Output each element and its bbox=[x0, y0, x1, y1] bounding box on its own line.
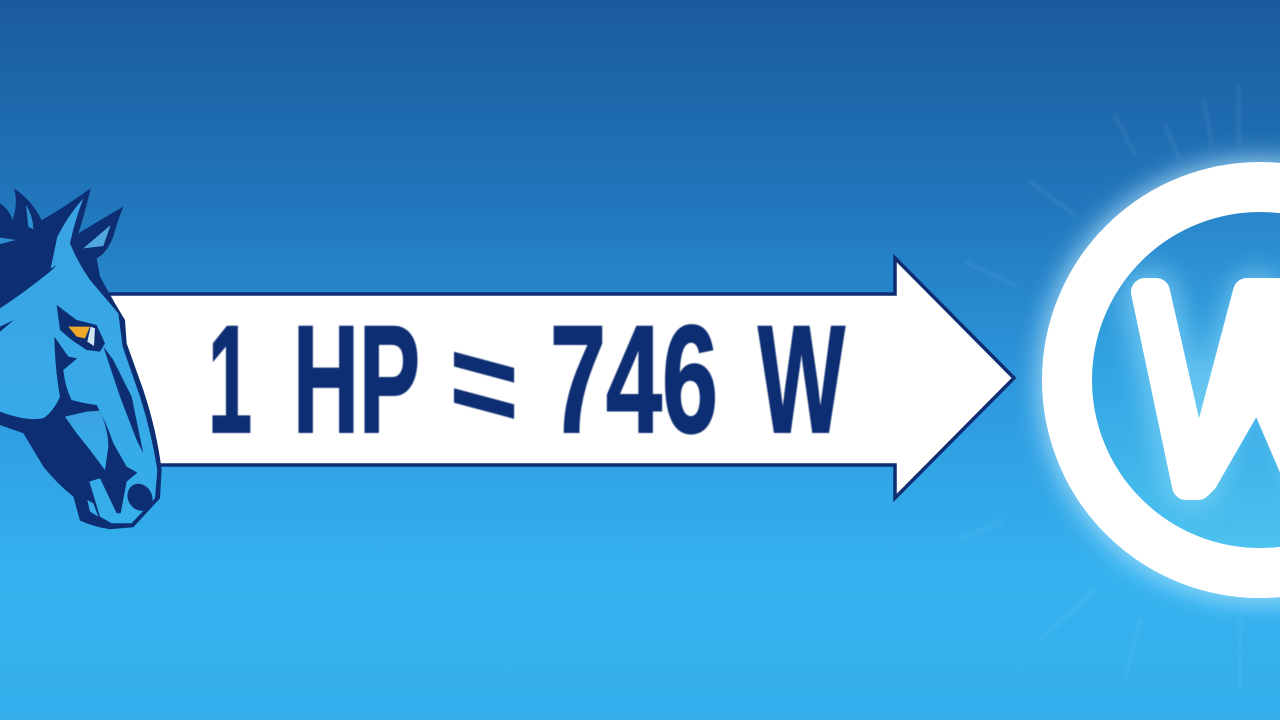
eye iris bbox=[68, 327, 90, 338]
horse face bbox=[0, 198, 157, 523]
mane strand bbox=[0, 265, 57, 332]
nostril bbox=[123, 479, 157, 515]
eye glint bbox=[87, 327, 95, 346]
inner glow around W bbox=[1150, 298, 1280, 478]
mouth highlight bbox=[87, 500, 98, 517]
glow bbox=[1067, 187, 1280, 573]
horse silhouette bbox=[0, 188, 162, 529]
mane highlights bbox=[0, 205, 33, 244]
equation: 1 HP ≃ 746 W: W bbox=[758, 294, 845, 465]
icon: horse head bbox=[0, 188, 162, 529]
nose stripe bbox=[103, 347, 143, 453]
icon: glowing watt circle bbox=[1067, 187, 1280, 573]
light rays around watt icon bbox=[960, 85, 1240, 690]
equation: 1 HP ≃ 746 W: 1 bbox=[208, 294, 252, 465]
cheek patch bbox=[65, 411, 108, 470]
arrow bbox=[100, 258, 1014, 498]
arrow shape bbox=[100, 258, 1014, 498]
ear inner bbox=[83, 225, 111, 248]
circle ring bbox=[1067, 187, 1280, 573]
circle inner bbox=[1092, 212, 1280, 548]
eye bbox=[57, 305, 105, 352]
equation: 1 HP ≃ 746 W: HP bbox=[293, 294, 420, 465]
equation: 1 HP ≃ 746 W bbox=[208, 294, 845, 469]
equation: 1 HP ≃ 746 W: 746 bbox=[550, 294, 718, 465]
letter W bbox=[1145, 292, 1280, 530]
equation: 1 HP ≃ 746 W: = bbox=[449, 300, 519, 469]
